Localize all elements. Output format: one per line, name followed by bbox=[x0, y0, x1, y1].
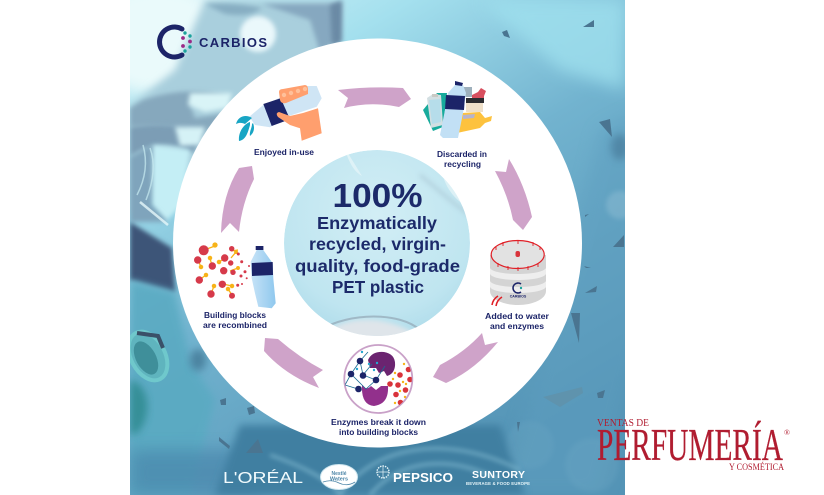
arrow: discarded to water bbox=[495, 159, 532, 230]
label: discarded in recycling: Discarded in bbox=[437, 149, 487, 159]
partner logo: Suntory bbox=[466, 469, 530, 486]
headline description: Enzymatically bbox=[317, 213, 437, 233]
headline description: PET plastic bbox=[332, 277, 424, 297]
icon: enzymatic reactor tank: CARBIOS bbox=[510, 294, 527, 298]
label: discarded in recycling: recycling bbox=[444, 159, 481, 169]
partner logo: L'Oreal: L'ORÉAL bbox=[223, 470, 303, 487]
headline description: quality, food-grade bbox=[295, 256, 460, 276]
label: enjoyed in-use: Enjoyed in-use bbox=[254, 147, 314, 157]
background photo of plastic bottles bbox=[90, 0, 640, 495]
label: building blocks are recombined bbox=[203, 310, 267, 330]
label: enzymes break it down: Enzymes break it down bbox=[331, 417, 426, 427]
headline 100%: 100% bbox=[332, 177, 422, 214]
label: enzymes break it down: into building blocks bbox=[339, 427, 418, 437]
icon: hand pouring bottle bbox=[236, 85, 322, 141]
partner logo: PepsiCo: PEPSICO bbox=[393, 470, 453, 485]
partner logo: PepsiCo bbox=[377, 466, 453, 485]
icon: enzyme breaking polymer bbox=[344, 345, 413, 413]
partner logo: Nestle Waters bbox=[320, 464, 358, 490]
publisher logo: Ventas de Perfumeria y Cosmetica: ® bbox=[784, 429, 791, 437]
center circle bbox=[284, 150, 472, 345]
label: added to water and enzymes bbox=[485, 311, 550, 331]
headline description bbox=[295, 213, 460, 297]
label: building blocks are recombined: are recombined bbox=[203, 320, 267, 330]
icon: building blocks and new bottle bbox=[194, 243, 276, 308]
publisher logo: Ventas de Perfumeria y Cosmetica: VENTAS DE bbox=[597, 417, 649, 429]
label: added to water and enzymes: Added to water bbox=[485, 311, 550, 321]
Carbios logo: CARBIOS bbox=[199, 35, 267, 50]
arrow: in-use to discarded bbox=[338, 87, 411, 108]
glass ring detail bbox=[130, 330, 170, 382]
label: building blocks are recombined: Building blocks bbox=[204, 310, 266, 320]
arrow: water to enzymes bbox=[433, 333, 498, 383]
partner logo: Suntory: BEVERAGE & FOOD EUROPE bbox=[466, 481, 530, 486]
headline description: recycled, virgin- bbox=[309, 234, 446, 254]
publisher logo: Ventas de Perfumeria y Cosmetica: Y COSMÉTICA bbox=[729, 461, 784, 473]
icon: enzymatic reactor tank bbox=[490, 240, 546, 306]
icon: pile of discarded packaging bbox=[423, 81, 492, 138]
white ring panel bbox=[173, 38, 582, 448]
glass shards bbox=[219, 20, 624, 453]
label: discarded in recycling bbox=[437, 149, 487, 169]
partner logo: Nestle Waters: Nestlé bbox=[331, 471, 347, 477]
label: enzymes break it down bbox=[331, 417, 426, 437]
arrow: building blocks to in-use bbox=[221, 166, 254, 233]
arrow: enzymes to building blocks bbox=[264, 338, 323, 388]
partner logo: Suntory: SUNTORY bbox=[472, 469, 525, 481]
label: added to water and enzymes: and enzymes bbox=[490, 321, 544, 331]
Carbios logo bbox=[160, 27, 267, 57]
partner logo: Nestle Waters: Waters bbox=[330, 476, 348, 482]
